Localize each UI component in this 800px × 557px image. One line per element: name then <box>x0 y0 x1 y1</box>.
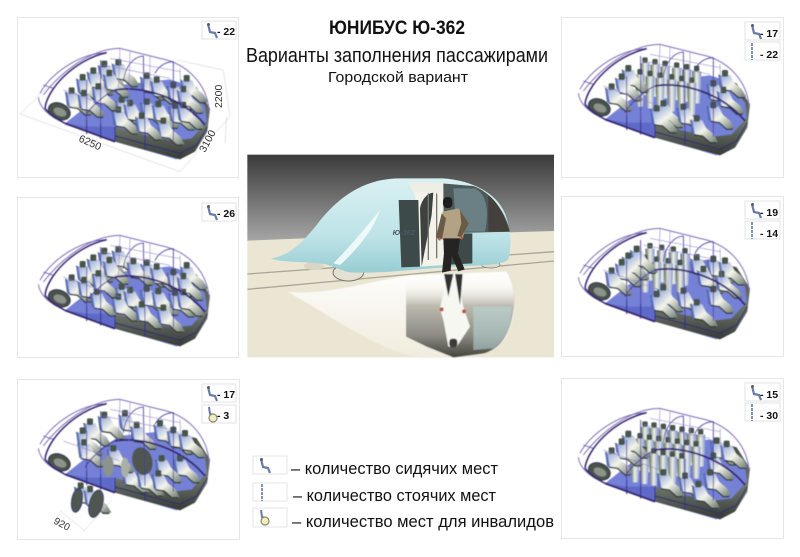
wheelchair with dimension 920: 920 <box>52 516 72 534</box>
bus body <box>271 178 510 273</box>
model lettering: Ю-362 <box>393 228 415 237</box>
legend: seated places: – количество сидячих мест <box>291 460 498 478</box>
reflective ground <box>247 231 554 357</box>
badge: 15 seated <box>745 383 780 401</box>
legend: seated places <box>253 456 498 478</box>
panel: variant 15 seated plus 30 standing <box>562 378 784 538</box>
bus cutaway: 17 seated 22 standing <box>578 44 750 155</box>
passenger figure <box>436 197 469 273</box>
badge: 22 seated: - 22 <box>217 26 235 38</box>
legend: standing places <box>253 483 496 505</box>
legend: wheelchair places <box>253 508 554 531</box>
legend: standing places: – количество стоячих мест <box>293 487 496 505</box>
body highlight <box>333 210 380 265</box>
badge: 26 seated: - 26 <box>217 208 235 220</box>
bus cutaway: 26 seats <box>38 235 210 346</box>
badge: 15 seated: - 15 <box>760 389 778 401</box>
panel: variant 26 seated <box>18 198 238 358</box>
badge: 30 standing: - 30 <box>760 410 778 422</box>
bus reflection <box>287 272 515 358</box>
badge: 22 standing: - 22 <box>760 49 778 61</box>
wheelchair with dimension 920 <box>52 482 112 534</box>
road lines <box>247 252 554 289</box>
dimension 6250: 6250 <box>77 133 103 153</box>
badge: 19 seated <box>745 201 780 219</box>
doorway interior <box>408 182 444 267</box>
badge: 3 wheelchair <box>202 405 236 423</box>
sky backdrop <box>247 155 554 241</box>
badge: 26 seated <box>202 203 236 221</box>
badge: 22 seated <box>202 21 236 39</box>
panel: variant 17 seated plus 22 standing <box>562 18 784 178</box>
bus cutaway: 22 seats <box>20 48 230 172</box>
photo: unibus render with passenger <box>247 155 554 358</box>
subtitle: Варианты заполнения пассажирами <box>246 45 548 67</box>
badge: 30 standing <box>745 403 780 422</box>
panel: variant 19 seated plus 14 standing <box>562 196 784 356</box>
badge: 14 standing: - 14 <box>760 228 778 240</box>
section label: Городской вариант <box>328 70 468 86</box>
legend <box>253 456 554 531</box>
badge: 3 wheelchair: - 3 <box>217 410 229 422</box>
window band <box>440 183 510 233</box>
open door leaves <box>399 200 420 267</box>
badge: 17 seated <box>745 22 780 40</box>
bus cutaway: 19 seated 14 standing <box>578 228 750 339</box>
dimension 2200: 2200 <box>213 84 225 108</box>
legend: wheelchair places: – количество мест для инвалидов <box>292 513 554 531</box>
panel: variant 17 seated plus 3 wheelchair <box>18 380 240 540</box>
badge: 17 seated: - 17 <box>760 28 778 40</box>
dimension 3100: 3100 <box>197 128 219 154</box>
panel: variant 22 seated <box>18 18 238 178</box>
bus cutaway: 15 seated 30 standing <box>578 408 750 519</box>
bus cutaway: wheelchair layout <box>38 399 210 510</box>
wheels <box>304 261 500 281</box>
title: ЮНИБУС Ю-362 <box>329 18 465 39</box>
badge: 14 standing <box>745 221 780 240</box>
badge: 17 seated <box>202 384 236 402</box>
badge: 22 standing <box>745 42 780 61</box>
badge: 19 seated: - 19 <box>760 207 778 219</box>
badge: 17 seated: - 17 <box>217 389 235 401</box>
